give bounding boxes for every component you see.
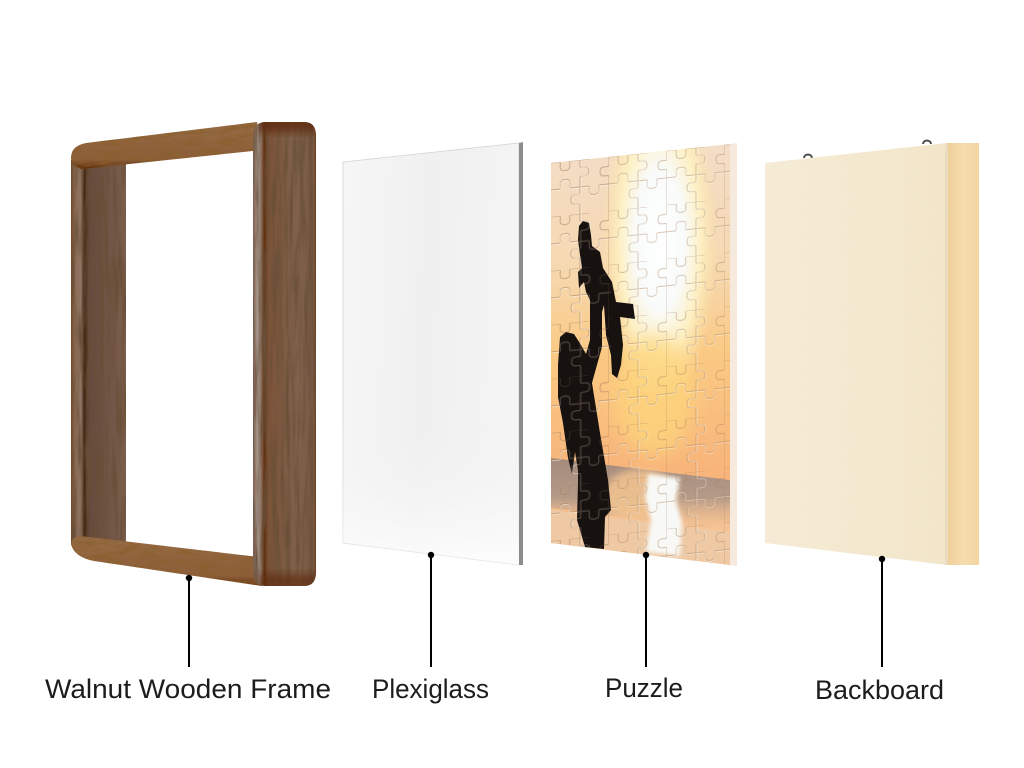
label: Puzzle: Puzzle bbox=[605, 673, 683, 703]
label: Walnut Wooden Frame: Walnut Wooden Frame bbox=[45, 674, 331, 704]
top rail of frame bbox=[71, 122, 262, 169]
leader line: backboard bbox=[879, 556, 885, 667]
sea band bbox=[551, 458, 730, 520]
backboard front bbox=[765, 143, 947, 565]
left post of frame bbox=[71, 160, 126, 545]
leader line: puzzle bbox=[643, 552, 649, 667]
puzzle bbox=[551, 143, 737, 566]
plexiglass bbox=[343, 142, 523, 565]
sun reflection bbox=[645, 474, 682, 556]
puzzle side edge bbox=[730, 143, 737, 566]
backboard side bbox=[947, 143, 979, 565]
leader line: frame bbox=[186, 575, 192, 667]
plexiglass edge bbox=[519, 142, 523, 565]
lower warm band bbox=[615, 335, 695, 455]
leader line: plexiglass bbox=[428, 552, 434, 667]
dark end grain bbox=[258, 116, 320, 590]
puzzle picture bbox=[551, 144, 730, 565]
edge highlight bbox=[945, 145, 948, 565]
jigsaw marks on silhouette bbox=[551, 157, 611, 548]
hanging hooks bbox=[804, 141, 931, 158]
silhouette of mother and child bbox=[558, 221, 635, 549]
label: Plexiglass: Plexiglass bbox=[372, 674, 489, 704]
dark end grain top bbox=[254, 122, 316, 136]
sand bbox=[551, 510, 730, 566]
sun glow bbox=[611, 147, 709, 374]
label: Backboard: Backboard bbox=[815, 675, 944, 705]
sunlit sea centre bbox=[604, 469, 676, 521]
walnut wooden frame bbox=[71, 116, 320, 590]
plexiglass lower sheen bbox=[343, 420, 519, 565]
dark end grain bottom bbox=[258, 574, 320, 590]
backboard bbox=[765, 141, 979, 565]
jigsaw cut lines bbox=[551, 120, 730, 580]
right post of frame bbox=[253, 122, 316, 586]
plexiglass front bbox=[343, 143, 519, 565]
sunset sky bbox=[551, 143, 730, 567]
bottom rail of frame bbox=[71, 536, 262, 586]
